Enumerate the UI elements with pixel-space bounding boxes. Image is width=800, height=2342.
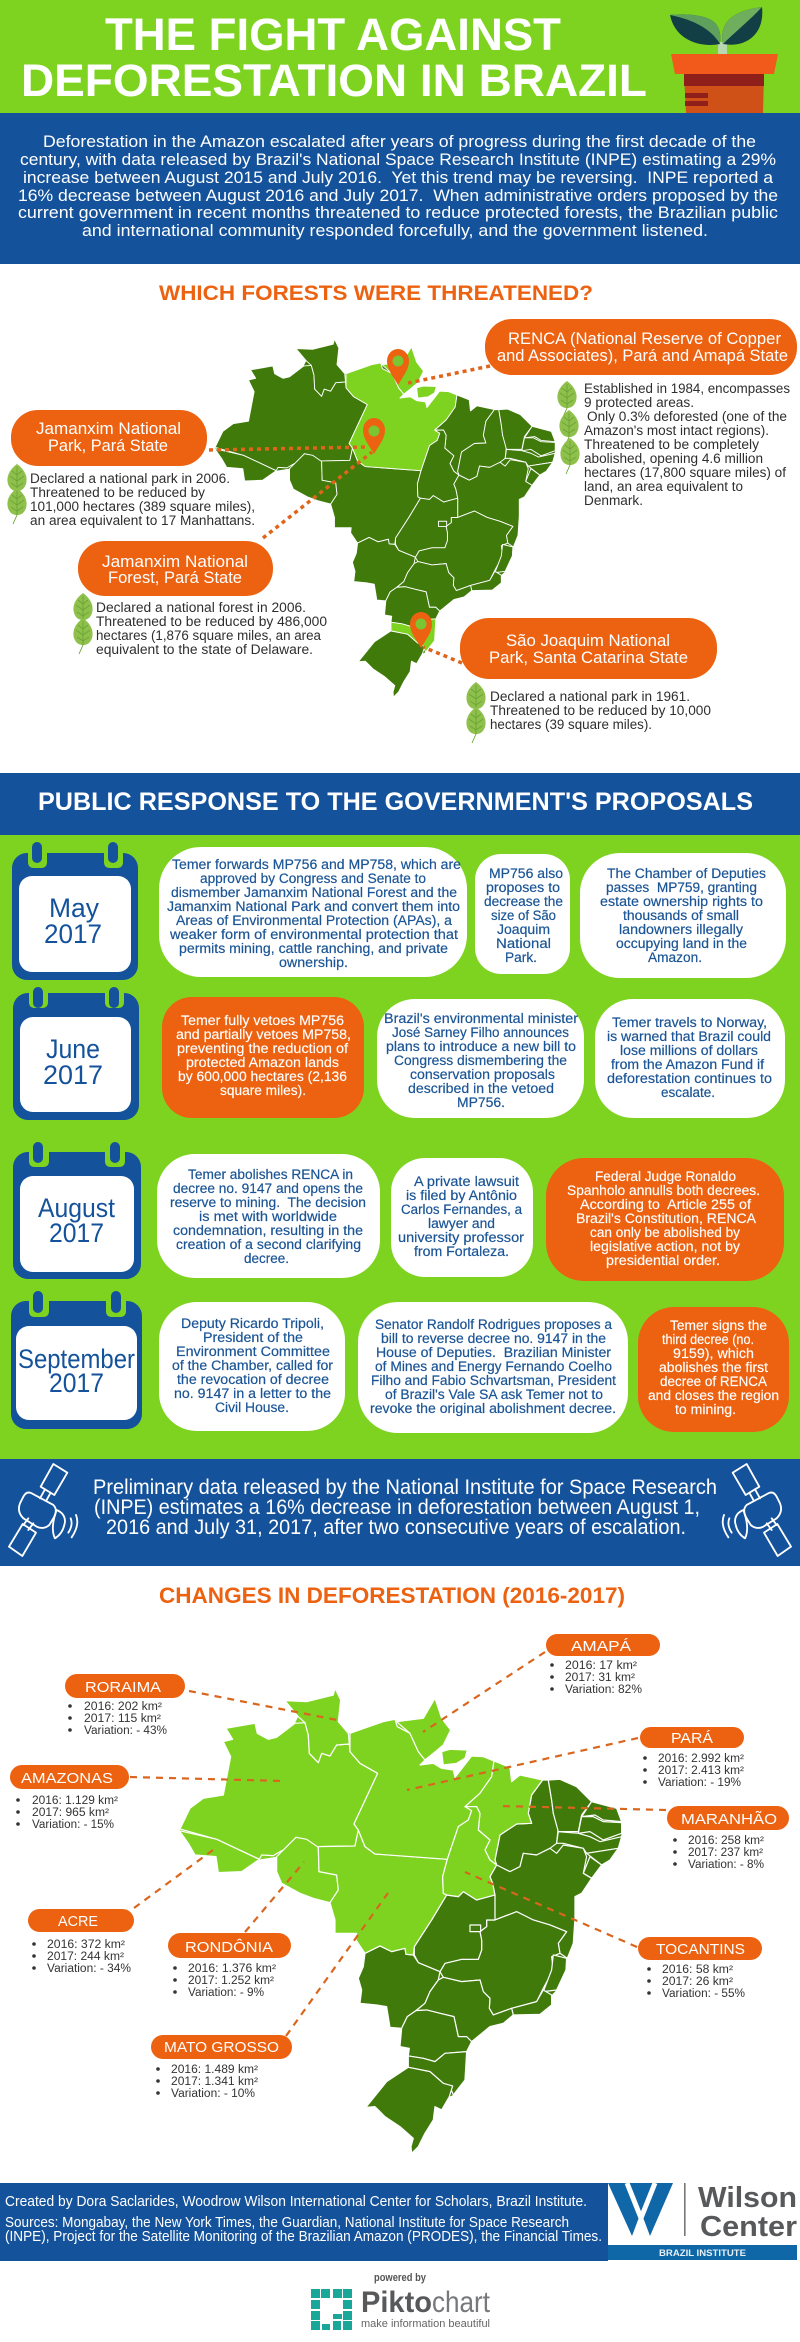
state: Mato Grosso: 2016: 1.489 km² bbox=[171, 2064, 258, 2076]
footer credits panel: (INPE), Project for the Satellite Monitoring of the Brazilian Amazon (PRODES), the Financial Times. bbox=[5, 2228, 602, 2245]
card: Chamber of Deputies: landowners illegally bbox=[619, 922, 743, 937]
footer credits panel bbox=[0, 2183, 608, 2261]
card: Randolf Rodrigues: Senator Randolf Rodrigues proposes a bbox=[375, 1317, 612, 1332]
callout: RENCA bbox=[485, 319, 797, 375]
text: Jamanxim park facts: Declared a national park in 2006. bbox=[30, 471, 230, 486]
state: Mato Grosso bbox=[151, 2035, 292, 2100]
calendar: May 2017: May bbox=[49, 893, 99, 923]
heading: changes in deforestation: CHANGES IN DEFORESTATION (2016-2017) bbox=[159, 1583, 625, 1608]
connector lines: forests bbox=[209, 366, 490, 663]
card: MP756 also: size of São bbox=[491, 908, 556, 923]
state: Amapa bbox=[546, 1634, 660, 1696]
state: Amazonas: 2017: 965 km² bbox=[32, 1807, 109, 1819]
calendar: September 2017: 2017 bbox=[49, 1368, 104, 1398]
card: Temer travels to Norway: escalate. bbox=[661, 1085, 715, 1100]
intro panel: century, with data released by Brazil's National Space Research Institute (INPE) estimating a 29% bbox=[20, 151, 776, 169]
callout: Sao Joaquim bbox=[460, 618, 717, 679]
state: Tocantins: 2017: 26 km² bbox=[662, 1976, 733, 1988]
text: RENCA facts: Amazon's most intact regions). bbox=[584, 423, 769, 438]
card: MP756 also: Joaquim bbox=[497, 922, 550, 937]
card: third decree bbox=[638, 1307, 789, 1432]
state: Para bbox=[640, 1727, 744, 1789]
state: Para: 2016: 2.992 km² bbox=[658, 1753, 744, 1765]
card: Randolf Rodrigues bbox=[358, 1302, 628, 1433]
card: Temer travels to Norway: is warned that Brazil could bbox=[607, 1029, 771, 1044]
callout: Jamanxim National Forest: Forest, Pará State bbox=[108, 569, 242, 587]
card: private lawsuit bbox=[391, 1158, 533, 1277]
card: Temer fully vetoes: Temer fully vetoes MP756 bbox=[181, 1013, 344, 1028]
card: Temer fully vetoes: preventing the reduction of bbox=[177, 1041, 348, 1056]
state: Acre bbox=[28, 1909, 134, 1975]
state: Tocantins: TOCANTINS bbox=[656, 1941, 745, 1958]
state: Tocantins bbox=[638, 1937, 762, 2000]
card: MP756 also: proposes to bbox=[486, 880, 560, 895]
text: Sao Joaquim facts: Threatened to be reduced by 10,000 bbox=[490, 703, 711, 718]
footer credits panel: Created by Dora Saclarides, Woodrow Wilson International Center for Scholars, Brazil Institute. bbox=[5, 2193, 587, 2210]
card: third decree: and closes the region bbox=[648, 1388, 779, 1403]
heading band: public response: PUBLIC RESPONSE TO THE GOVERNMENT'S PROPOSALS bbox=[38, 788, 753, 816]
card: environmental minister: Congress dismembering the bbox=[394, 1053, 567, 1068]
state: Amazonas: 2016: 1.129 km² bbox=[32, 1795, 118, 1807]
card: Temer forwards: Areas of Environmental Protection (APAs), a bbox=[176, 913, 453, 928]
card: Randolf Rodrigues: of Mines and Energy Fernando Coelho bbox=[375, 1359, 612, 1374]
state: Rondonia: Variation: - 9% bbox=[188, 1987, 264, 1999]
card: environmental minister: MP756. bbox=[457, 1095, 505, 1110]
calendar: May 2017: 2017 bbox=[44, 919, 102, 949]
state: Roraima: RORAIMA bbox=[85, 1679, 161, 1696]
card: Temer forwards: dismember Jamanxim National Forest and the bbox=[171, 885, 457, 900]
card: Temer forwards bbox=[159, 847, 467, 977]
icon: satellite right bbox=[723, 1464, 791, 1556]
card: Ricardo Tripoli: President of the bbox=[203, 1330, 303, 1345]
callout: Jamanxim National Park bbox=[11, 410, 207, 466]
card: Federal Judge bbox=[546, 1158, 784, 1281]
text: Jamanxim park facts: 101,000 hectares (389 square miles), bbox=[30, 499, 255, 514]
card: Temer forwards: approved by Congress and Senate to bbox=[200, 871, 426, 886]
card: Temer abolishes RENCA: decree. bbox=[244, 1251, 289, 1266]
card: third decree: to mining. bbox=[675, 1402, 736, 1417]
card: private lawsuit: A private lawsuit bbox=[414, 1174, 519, 1189]
state: Maranhao: MARANHÃO bbox=[681, 1811, 777, 1828]
card: Ricardo Tripoli: of the Chamber, called for bbox=[172, 1358, 334, 1373]
text: Jamanxim forest facts: hectares (1,876 square miles, an area bbox=[96, 628, 321, 643]
state: Para: PARÁ bbox=[671, 1730, 713, 1747]
callout: Jamanxim National Forest bbox=[78, 541, 273, 596]
card: third decree: Temer signs the bbox=[670, 1318, 767, 1333]
state: Rondonia: RONDÔNIA bbox=[185, 1939, 273, 1956]
calendar: September 2017: September bbox=[18, 1344, 135, 1374]
card: Ricardo Tripoli bbox=[159, 1302, 345, 1431]
text: RENCA facts: abolished, opening 4.6 million bbox=[584, 451, 763, 466]
intro panel: Deforestation in the Amazon escalated after years of progress during the first decade of the bbox=[43, 133, 756, 151]
card: environmental minister: described in the vetoed bbox=[408, 1081, 554, 1096]
card: Temer fully vetoes: square miles). bbox=[220, 1083, 306, 1098]
callout: Jamanxim National Park: Park, Pará State bbox=[48, 437, 168, 455]
state: Maranhao: Variation: - 8% bbox=[688, 1859, 764, 1871]
card: Temer forwards: permits mining, cattle ranching, and private bbox=[179, 941, 448, 956]
card: Randolf Rodrigues: revoke the original abolishment decree. bbox=[370, 1401, 616, 1416]
card: Temer abolishes RENCA bbox=[157, 1154, 380, 1278]
panel: INPE estimate bbox=[0, 1459, 800, 1566]
card: private lawsuit: from Fortaleza. bbox=[414, 1244, 509, 1259]
state: Tocantins: 2016: 58 km² bbox=[662, 1964, 733, 1976]
card: environmental minister: José Sarney Filho announces bbox=[392, 1025, 569, 1040]
card: Temer travels to Norway bbox=[595, 999, 785, 1118]
card: Ricardo Tripoli: no. 9147 in a letter to the bbox=[174, 1386, 331, 1401]
text: Jamanxim forest facts: equivalent to the state of Delaware. bbox=[96, 642, 313, 657]
card: Temer forwards: Temer forwards MP756 and MP758, which are bbox=[172, 857, 461, 872]
card: Temer travels to Norway: Temer travels to Norway, bbox=[612, 1015, 767, 1030]
text: RENCA facts: Only 0.3% deforested (one of the bbox=[587, 409, 787, 424]
card: Temer fully vetoes: by 600,000 hectares (2,136 bbox=[178, 1069, 347, 1084]
card: Federal Judge: Spanholo annulls both decrees. bbox=[567, 1183, 760, 1198]
heading: which forests: WHICH FORESTS WERE THREATENED? bbox=[159, 282, 593, 305]
intro panel: current government in recent months threatened to reduce protected forests, the Brazilian public bbox=[18, 204, 778, 222]
text: INPE estimate: (INPE) estimates a 16% decrease in deforestation between August 1, bbox=[94, 1496, 700, 1519]
card: third decree: decree of RENCA bbox=[660, 1374, 767, 1389]
text: Sao Joaquim facts: Declared a national park in 1961. bbox=[490, 689, 690, 704]
card: Temer forwards: Jamanxim National Park and convert them into bbox=[167, 899, 460, 914]
state: Mato Grosso: MATO GROSSO bbox=[164, 2039, 279, 2056]
card: private lawsuit: lawyer and bbox=[428, 1216, 495, 1231]
card: Federal Judge: According to Article 255 of bbox=[580, 1197, 751, 1212]
icon: map pins bbox=[363, 349, 432, 648]
card: MP756 also bbox=[475, 854, 570, 974]
logo: Wilson Center: Center bbox=[700, 2211, 797, 2243]
card: Chamber of Deputies bbox=[580, 853, 786, 978]
state: Amapa: 2017: 31 km² bbox=[565, 1672, 635, 1684]
state: Amapa: 2016: 17 km² bbox=[565, 1660, 637, 1672]
card: Ricardo Tripoli: Environment Committee bbox=[176, 1344, 330, 1359]
state: Roraima: Variation: - 43% bbox=[84, 1725, 167, 1737]
state: Roraima: 2017: 115 km² bbox=[84, 1713, 161, 1725]
logo: Piktochart: make information beautiful bbox=[361, 2318, 490, 2330]
text: Jamanxim forest facts: Declared a national forest in 2006. bbox=[96, 600, 306, 615]
card: Temer fully vetoes bbox=[162, 997, 364, 1118]
text: RENCA facts bbox=[557, 381, 790, 508]
intro panel bbox=[0, 113, 800, 264]
card: environmental minister bbox=[377, 999, 584, 1118]
state: Roraima: 2016: 202 km² bbox=[84, 1701, 162, 1713]
card: Temer forwards: weaker form of environmental protection that bbox=[169, 927, 458, 942]
text: INPE estimate: 2016 and July 31, 2017, after two consecutive years of escalation. bbox=[106, 1516, 686, 1539]
card: MP756 also: National bbox=[496, 936, 551, 951]
card: Randolf Rodrigues: Filho and Fabio Schvartsman, President bbox=[371, 1373, 616, 1388]
calendar: August 2017: 2017 bbox=[49, 1218, 104, 1248]
state: Roraima bbox=[65, 1674, 185, 1737]
calendar: August 2017: August bbox=[38, 1193, 115, 1223]
card: Temer travels to Norway: deforestation continues to bbox=[607, 1071, 772, 1086]
state: Maranhao: 2017: 237 km² bbox=[688, 1847, 763, 1859]
map: deforestation by state bbox=[179, 1688, 622, 2153]
card: Temer fully vetoes: protected Amazon lands bbox=[186, 1055, 339, 1070]
card: Ricardo Tripoli: the revocation of decree bbox=[177, 1372, 329, 1387]
card: Ricardo Tripoli: Civil House. bbox=[215, 1400, 289, 1415]
state: Rondonia: 2017: 1.252 km² bbox=[188, 1975, 274, 1987]
card: environmental minister: Brazil's environmental minister bbox=[384, 1011, 579, 1026]
state: Amazonas: Variation: - 15% bbox=[32, 1819, 114, 1831]
state: Amapa: Variation: 82% bbox=[565, 1684, 642, 1696]
text: Jamanxim forest facts: Threatened to be reduced by 486,000 bbox=[96, 614, 327, 629]
title: THE FIGHT AGAINST bbox=[105, 9, 561, 60]
calendar: May 2017 bbox=[12, 842, 138, 980]
card: Chamber of Deputies: estate ownership rights to bbox=[600, 894, 763, 909]
card: Chamber of Deputies: passes MP759, granting bbox=[606, 880, 757, 895]
text: RENCA facts: Established in 1984, encompasses bbox=[584, 381, 790, 396]
timeline panel background bbox=[0, 835, 800, 1459]
state: Acre: ACRE bbox=[58, 1913, 98, 1930]
card: Temer fully vetoes: and partially vetoes MP758, bbox=[176, 1027, 351, 1042]
card: Randolf Rodrigues: House of Deputies. Brazilian Minister bbox=[376, 1345, 612, 1360]
card: Chamber of Deputies: occupying land in the bbox=[616, 936, 747, 951]
icon: Piktochart mark bbox=[311, 2289, 352, 2330]
card: Chamber of Deputies: The Chamber of Deputies bbox=[607, 866, 766, 881]
text: RENCA facts: hectares (17,800 square miles) of bbox=[584, 465, 786, 480]
text: RENCA facts: Threatened to be completely bbox=[584, 437, 759, 452]
state: Maranhao bbox=[667, 1806, 789, 1871]
logo: Piktochart bbox=[311, 2272, 491, 2330]
card: Federal Judge: legislative action, not by bbox=[590, 1239, 740, 1254]
card: Temer abolishes RENCA: decree no. 9147 and opens the bbox=[173, 1181, 363, 1196]
card: Ricardo Tripoli: Deputy Ricardo Tripoli, bbox=[181, 1316, 324, 1331]
callout: RENCA: RENCA (National Reserve of Copper bbox=[508, 330, 781, 348]
card: Federal Judge: can only be abolished by bbox=[590, 1225, 740, 1240]
card: Chamber of Deputies: Amazon. bbox=[648, 950, 702, 965]
text: Jamanxim park facts bbox=[7, 464, 255, 528]
card: environmental minister: plans to introduce a new bill to bbox=[386, 1039, 576, 1054]
text: RENCA facts: Denmark. bbox=[584, 493, 643, 508]
title bbox=[21, 9, 647, 106]
logo: Wilson Center: Wilson bbox=[698, 2182, 797, 2214]
connector lines: states bbox=[130, 1652, 666, 2036]
state: Rondonia bbox=[168, 1933, 291, 1999]
card: Temer abolishes RENCA: condemnation, resulting in the bbox=[173, 1223, 363, 1238]
text: RENCA facts: 9 protected areas. bbox=[584, 395, 694, 410]
text: Jamanxim park facts: an area equivalent to 17 Manhattans. bbox=[30, 513, 255, 528]
intro panel: and international community responded forcefully, and the government listened. bbox=[82, 222, 708, 240]
logo: Piktochart: chart bbox=[432, 2286, 491, 2319]
state: Acre: Variation: - 34% bbox=[47, 1963, 131, 1975]
state: Para: Variation: - 19% bbox=[658, 1777, 741, 1789]
icon: potted plant bbox=[670, 7, 778, 113]
state: Mato Grosso: Variation: - 10% bbox=[171, 2088, 255, 2100]
text: Sao Joaquim facts bbox=[466, 682, 711, 743]
card: Randolf Rodrigues: bill to reverse decree no. 9147 in the bbox=[381, 1331, 606, 1346]
calendar: June 2017: June bbox=[46, 1034, 100, 1064]
card: third decree: 9159), which bbox=[673, 1346, 754, 1361]
card: Federal Judge: Brazil's Constitution, RENCA bbox=[576, 1211, 756, 1226]
logo: Piktochart: Pikto bbox=[361, 2286, 432, 2319]
state: Rondonia: 2016: 1.376 km² bbox=[188, 1963, 276, 1975]
logo: Piktochart: powered by bbox=[374, 2272, 427, 2284]
icon: satellite left bbox=[9, 1464, 77, 1556]
calendar: August 2017 bbox=[13, 1142, 141, 1279]
state: Acre: 2017: 244 km² bbox=[47, 1951, 124, 1963]
card: MP756 also: decrease the bbox=[484, 894, 563, 909]
card: private lawsuit: is filed by Antônio bbox=[406, 1188, 517, 1203]
card: third decree: third decree (no. bbox=[662, 1332, 754, 1347]
state: Mato Grosso: 2017: 1.341 km² bbox=[171, 2076, 258, 2088]
text: Jamanxim park facts: Threatened to be reduced by bbox=[30, 485, 205, 500]
state: Para: 2017: 2.413 km² bbox=[658, 1765, 744, 1777]
text: Sao Joaquim facts: hectares (39 square miles). bbox=[490, 717, 652, 732]
card: Temer abolishes RENCA: Temer abolishes RENCA in bbox=[188, 1167, 353, 1182]
card: private lawsuit: university professor bbox=[398, 1230, 525, 1245]
state: Amazonas bbox=[10, 1765, 129, 1831]
card: Temer abolishes RENCA: creation of a second clarifying bbox=[176, 1237, 361, 1252]
card: Temer travels to Norway: lose millions of dollars bbox=[620, 1043, 758, 1058]
logo: Wilson Center bbox=[608, 2182, 797, 2260]
title: DEFORESTATION IN BRAZIL bbox=[21, 55, 647, 106]
card: Federal Judge: Federal Judge Ronaldo bbox=[595, 1169, 736, 1184]
card: environmental minister: conservation proposals bbox=[410, 1067, 555, 1082]
state: Tocantins: Variation: - 55% bbox=[662, 1988, 745, 2000]
callout: Jamanxim National Forest: Jamanxim National bbox=[102, 553, 248, 571]
state: Maranhao: 2016: 258 km² bbox=[688, 1835, 764, 1847]
card: private lawsuit: Carlos Fernandes, a bbox=[401, 1202, 522, 1217]
text: Jamanxim forest facts bbox=[73, 593, 327, 657]
calendar: September 2017 bbox=[11, 1291, 142, 1429]
text: INPE estimate bbox=[93, 1476, 717, 1539]
card: Chamber of Deputies: thousands of small bbox=[623, 908, 739, 923]
card: Temer travels to Norway: from the Amazon Fund if bbox=[611, 1057, 764, 1072]
footer credits panel: Sources: Mongabay, the New York Times, the Guardian, National Institute for Space Research bbox=[5, 2214, 569, 2231]
card: MP756 also: MP756 also bbox=[489, 866, 563, 881]
calendar: June 2017: 2017 bbox=[43, 1060, 103, 1090]
card: Randolf Rodrigues: of Brazil's Vale SA ask Temer not to bbox=[385, 1387, 603, 1402]
state: Amazonas: AMAZONAS bbox=[21, 1770, 113, 1787]
map: threatened forests bbox=[215, 339, 555, 697]
card: third decree: abolishes the first bbox=[659, 1360, 768, 1375]
callout: RENCA: and Associates), Pará and Amapá State bbox=[497, 347, 788, 365]
text: INPE estimate: Preliminary data released by the National Institute for Space Research bbox=[93, 1476, 717, 1499]
card: Federal Judge: presidential order. bbox=[606, 1253, 720, 1268]
state: Acre: 2016: 372 km² bbox=[47, 1939, 125, 1951]
logo: Wilson Center: BRAZIL INSTITUTE bbox=[659, 2248, 746, 2259]
card: Temer abolishes RENCA: is met with worldwide bbox=[199, 1209, 337, 1224]
callout: Jamanxim National Park: Jamanxim National bbox=[36, 420, 181, 438]
card: Temer abolishes RENCA: reserve to mining. The decision bbox=[170, 1195, 366, 1210]
state: Amapa: AMAPÁ bbox=[571, 1638, 631, 1655]
intro panel: 16% decrease between August 2016 and July 2017. When administrative orders proposed by the bbox=[18, 187, 778, 205]
heading band: public response bbox=[0, 773, 800, 835]
text: RENCA facts: land, an area equivalent to bbox=[584, 479, 743, 494]
callout: Sao Joaquim: Park, Santa Catarina State bbox=[489, 649, 688, 667]
intro panel: increase between August 2015 and July 2016. Yet this trend may be reversing. INPE reported a bbox=[23, 169, 774, 187]
card: MP756 also: Park. bbox=[505, 950, 537, 965]
callout: Sao Joaquim: São Joaquim National bbox=[506, 632, 670, 650]
header band bbox=[0, 0, 800, 113]
card: Temer forwards: ownership. bbox=[279, 955, 348, 970]
calendar: June 2017 bbox=[13, 987, 139, 1120]
